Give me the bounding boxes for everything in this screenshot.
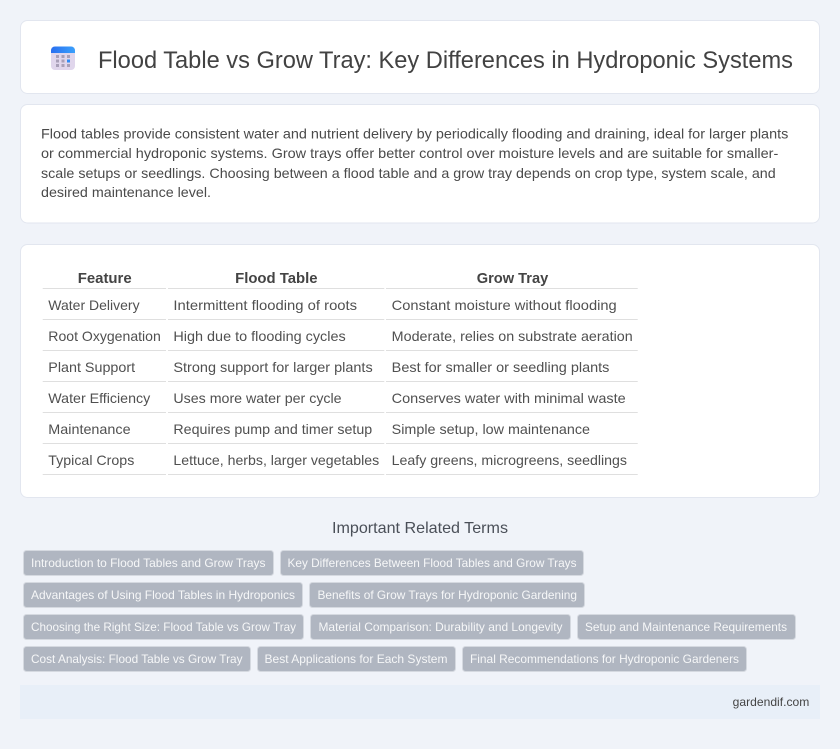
tag: Setup and Maintenance Requirements (585, 620, 787, 634)
icon: calendar (51, 46, 75, 70)
row: water efficiency: Water Efficiency (48, 390, 150, 406)
tag (24, 646, 250, 672)
row: root oxygenation (48, 328, 633, 344)
row: water delivery: Water Delivery (48, 297, 140, 313)
tag: Best Applications for Each System (264, 652, 448, 666)
panel: introduction (20, 104, 820, 223)
row: water efficiency: Uses more water per cycle (173, 390, 342, 406)
row: plant support: Strong support for larger plants (173, 359, 373, 375)
table header: Feature (78, 270, 132, 287)
tag: Material Comparison: Durability and Longevity (318, 620, 562, 634)
row: typical crops: Leafy greens, microgreens, seedlings (392, 452, 627, 468)
row: maintenance (48, 421, 590, 437)
tag (578, 614, 796, 640)
tag: Cost Analysis: Flood Table vs Grow Tray (31, 652, 242, 666)
footer source: gardendif.com (733, 695, 809, 709)
tag (24, 550, 274, 576)
tag (310, 582, 584, 608)
tag: Introduction to Flood Tables and Grow Trays (31, 556, 266, 570)
tag: Choosing the Right Size: Flood Table vs Grow Tray (31, 620, 296, 634)
panel: title card (20, 20, 820, 94)
row: typical crops: Typical Crops (48, 452, 134, 468)
intro paragraph: desired maintenance level. (41, 184, 211, 200)
row: maintenance: Simple setup, low maintenance (392, 421, 590, 437)
table header: Grow Tray (477, 270, 549, 287)
intro paragraph: scale setups or seedlings. Choosing between a flood table and a grow tray depends on crop type, system scale, and (41, 165, 776, 181)
tag: Final Recommendations for Hydroponic Gardeners (470, 652, 739, 666)
table header (78, 270, 549, 287)
row: plant support: Best for smaller or seedling plants (392, 359, 609, 375)
row: plant support: Plant Support (48, 359, 135, 375)
related terms tags (24, 550, 796, 672)
row: water delivery (48, 297, 617, 313)
tag (280, 550, 584, 576)
row: root oxygenation: Root Oxygenation (48, 328, 161, 344)
intro paragraph: Flood tables provide consistent water and nutrient delivery by periodically flooding and draining, ideal for larger plants (41, 126, 788, 142)
title: Flood Table vs Grow Tray: Key Differences in Hydroponic Systems (98, 47, 793, 74)
tag (24, 582, 302, 608)
tag (462, 646, 746, 672)
heading: important related terms: Important Related Terms (332, 520, 508, 537)
tag: Key Differences Between Flood Tables and Grow Trays (288, 556, 576, 570)
row: typical crops (48, 452, 627, 468)
row: maintenance: Requires pump and timer setup (173, 421, 372, 437)
table header: Flood Table (235, 270, 318, 287)
row: maintenance: Maintenance (48, 421, 131, 437)
row: root oxygenation: Moderate, relies on substrate aeration (392, 328, 633, 344)
tag: Benefits of Grow Trays for Hydroponic Gardening (318, 588, 577, 602)
row: water delivery: Constant moisture without flooding (392, 297, 617, 313)
tag: Advantages of Using Flood Tables in Hydroponics (31, 588, 295, 602)
row: water efficiency (48, 390, 626, 406)
row: plant support (48, 359, 609, 375)
row: water delivery: Intermittent flooding of roots (173, 297, 357, 313)
row: water efficiency: Conserves water with minimal waste (392, 390, 626, 406)
intro paragraph: or commercial hydroponic systems. Grow trays offer better control over moisture levels and are suitable for smaller- (41, 145, 779, 161)
row: root oxygenation: High due to flooding cycles (173, 328, 346, 344)
intro paragraph (41, 126, 788, 200)
tag (310, 614, 570, 640)
tag (24, 614, 304, 640)
footer (20, 685, 820, 719)
row: typical crops: Lettuce, herbs, larger vegetables (173, 452, 379, 468)
tag (258, 646, 456, 672)
panel: comparison table (20, 244, 820, 498)
